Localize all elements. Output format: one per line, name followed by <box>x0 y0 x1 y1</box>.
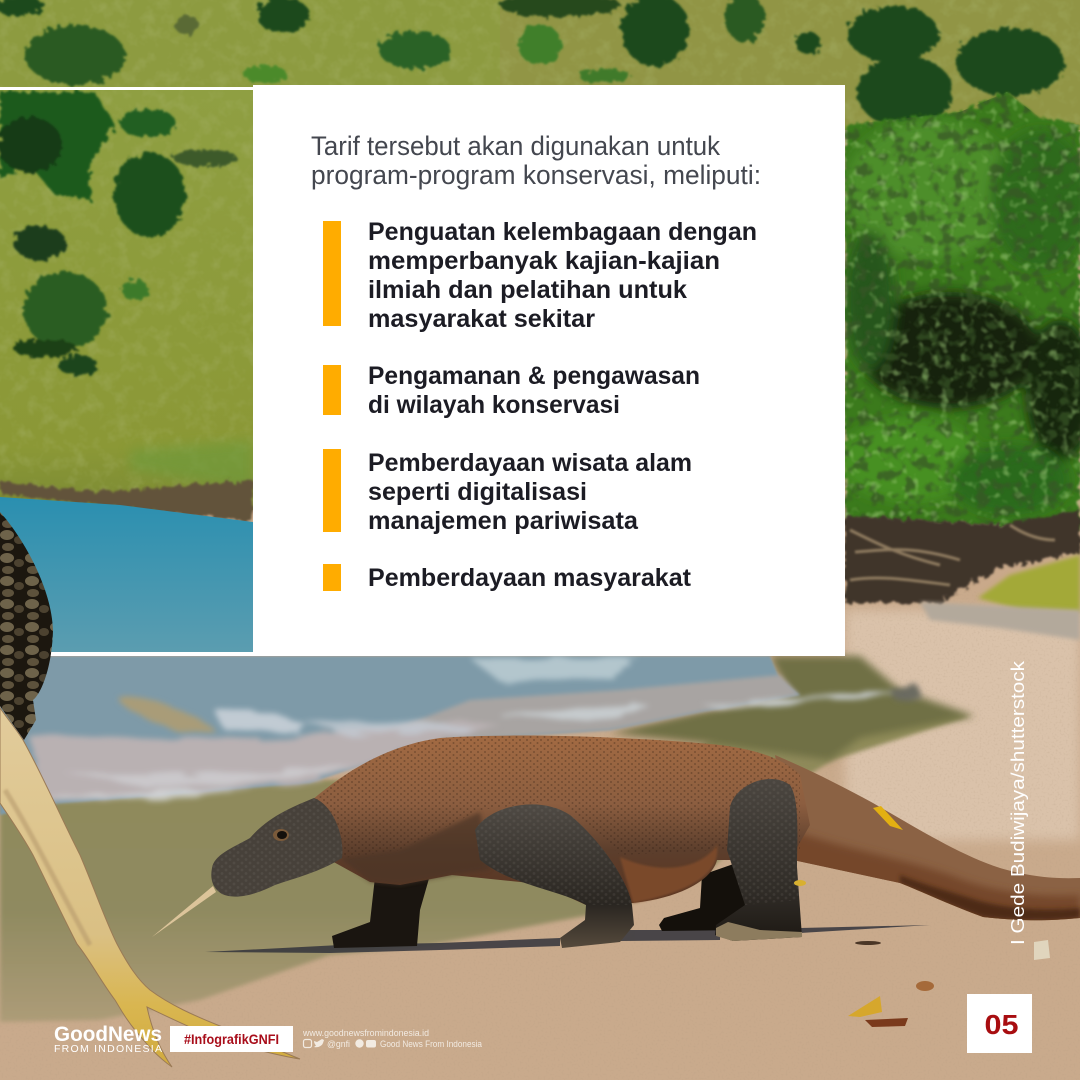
green shore grass <box>130 440 253 483</box>
bird body (scaled egg shape) <box>0 512 53 740</box>
beach debris <box>794 880 1050 1027</box>
background photo: forest on right <box>840 90 1080 640</box>
intro text <box>311 131 761 190</box>
body <box>312 736 810 905</box>
list item 1: Penguatan kelembagaan dengan <box>368 218 757 246</box>
ground shadow <box>205 925 930 953</box>
list item 2: Pengamanan & pengawasan <box>368 362 700 390</box>
yellow grass <box>978 555 1080 612</box>
wave foam <box>28 658 922 803</box>
far hind leg <box>659 860 745 931</box>
background photo: top hillside <box>0 0 1080 130</box>
social icons left <box>304 1039 324 1048</box>
page number <box>967 994 1032 1053</box>
page number: 05 <box>984 1009 1018 1040</box>
list item 2: di wilayah konservasi <box>368 391 620 419</box>
komodo dragon <box>152 736 1080 948</box>
chest shade <box>340 812 490 885</box>
dry sand <box>0 590 1080 1080</box>
inset photo panel: hillside and lagoon <box>0 90 253 652</box>
footer contacts: @gnfi <box>327 1039 350 1049</box>
list item 3: Pemberdayaan wisata alam <box>368 449 692 477</box>
leg shading streak <box>5 790 90 945</box>
head and neck <box>211 798 343 897</box>
background photo: beach <box>0 590 1080 1080</box>
hind foot claws <box>716 922 802 941</box>
hillside <box>0 90 253 510</box>
driftwood roots <box>845 510 1080 603</box>
far front leg <box>332 868 432 948</box>
footer logo: FROM INDONESIA <box>54 1043 162 1055</box>
intro text: Tarif tersebut akan digunakan untuk <box>311 131 720 161</box>
tongue <box>152 886 216 937</box>
shore stones <box>920 602 1080 640</box>
trees <box>0 92 237 375</box>
belly <box>620 845 717 903</box>
near front leg <box>475 804 634 948</box>
list item 3: seperti digitalisasi <box>368 478 587 506</box>
yellow mark <box>873 806 903 830</box>
list item 1 <box>323 218 757 333</box>
social icons right <box>355 1039 376 1048</box>
wet sand <box>0 700 970 1022</box>
lagoon water <box>0 497 253 652</box>
list item 1: memperbanyak kajian-kajian <box>368 247 720 275</box>
inset white frame top <box>0 87 253 90</box>
bird leg and foot <box>0 708 300 1067</box>
inset white frame bottom <box>0 652 253 656</box>
eye <box>273 829 289 841</box>
hillside shrubs <box>0 0 1064 128</box>
list item 3 <box>323 449 692 535</box>
footer contacts <box>302 1028 482 1049</box>
olive shallows <box>610 656 975 760</box>
list item 1: ilmiah dan pelatihan untuk <box>368 276 687 304</box>
list item 2 <box>323 362 700 419</box>
near hind leg <box>715 779 802 941</box>
tail <box>770 750 1080 925</box>
sea <box>0 656 800 815</box>
list item 3: manajemen pariwisata <box>368 507 639 535</box>
footer contacts: Good News From Indonesia <box>380 1039 482 1049</box>
grey wash near shore <box>380 675 800 742</box>
hashtag label: #InfografikGNFI <box>184 1032 279 1047</box>
hashtag label <box>170 1026 293 1052</box>
list item 1: masyarakat sekitar <box>368 305 595 333</box>
footer logo: GoodNews <box>54 1023 162 1046</box>
rocky shore <box>0 480 253 522</box>
footer contacts: www.goodnewsfromindonesia.id <box>302 1028 429 1038</box>
intro text: program-program konservasi, meliputi: <box>311 160 761 190</box>
photo credit: I Gede Budiwijaya/shutterstock <box>1008 660 1028 945</box>
list item 4: Pemberdayaan masyarakat <box>368 564 692 592</box>
white content panel <box>253 85 845 656</box>
